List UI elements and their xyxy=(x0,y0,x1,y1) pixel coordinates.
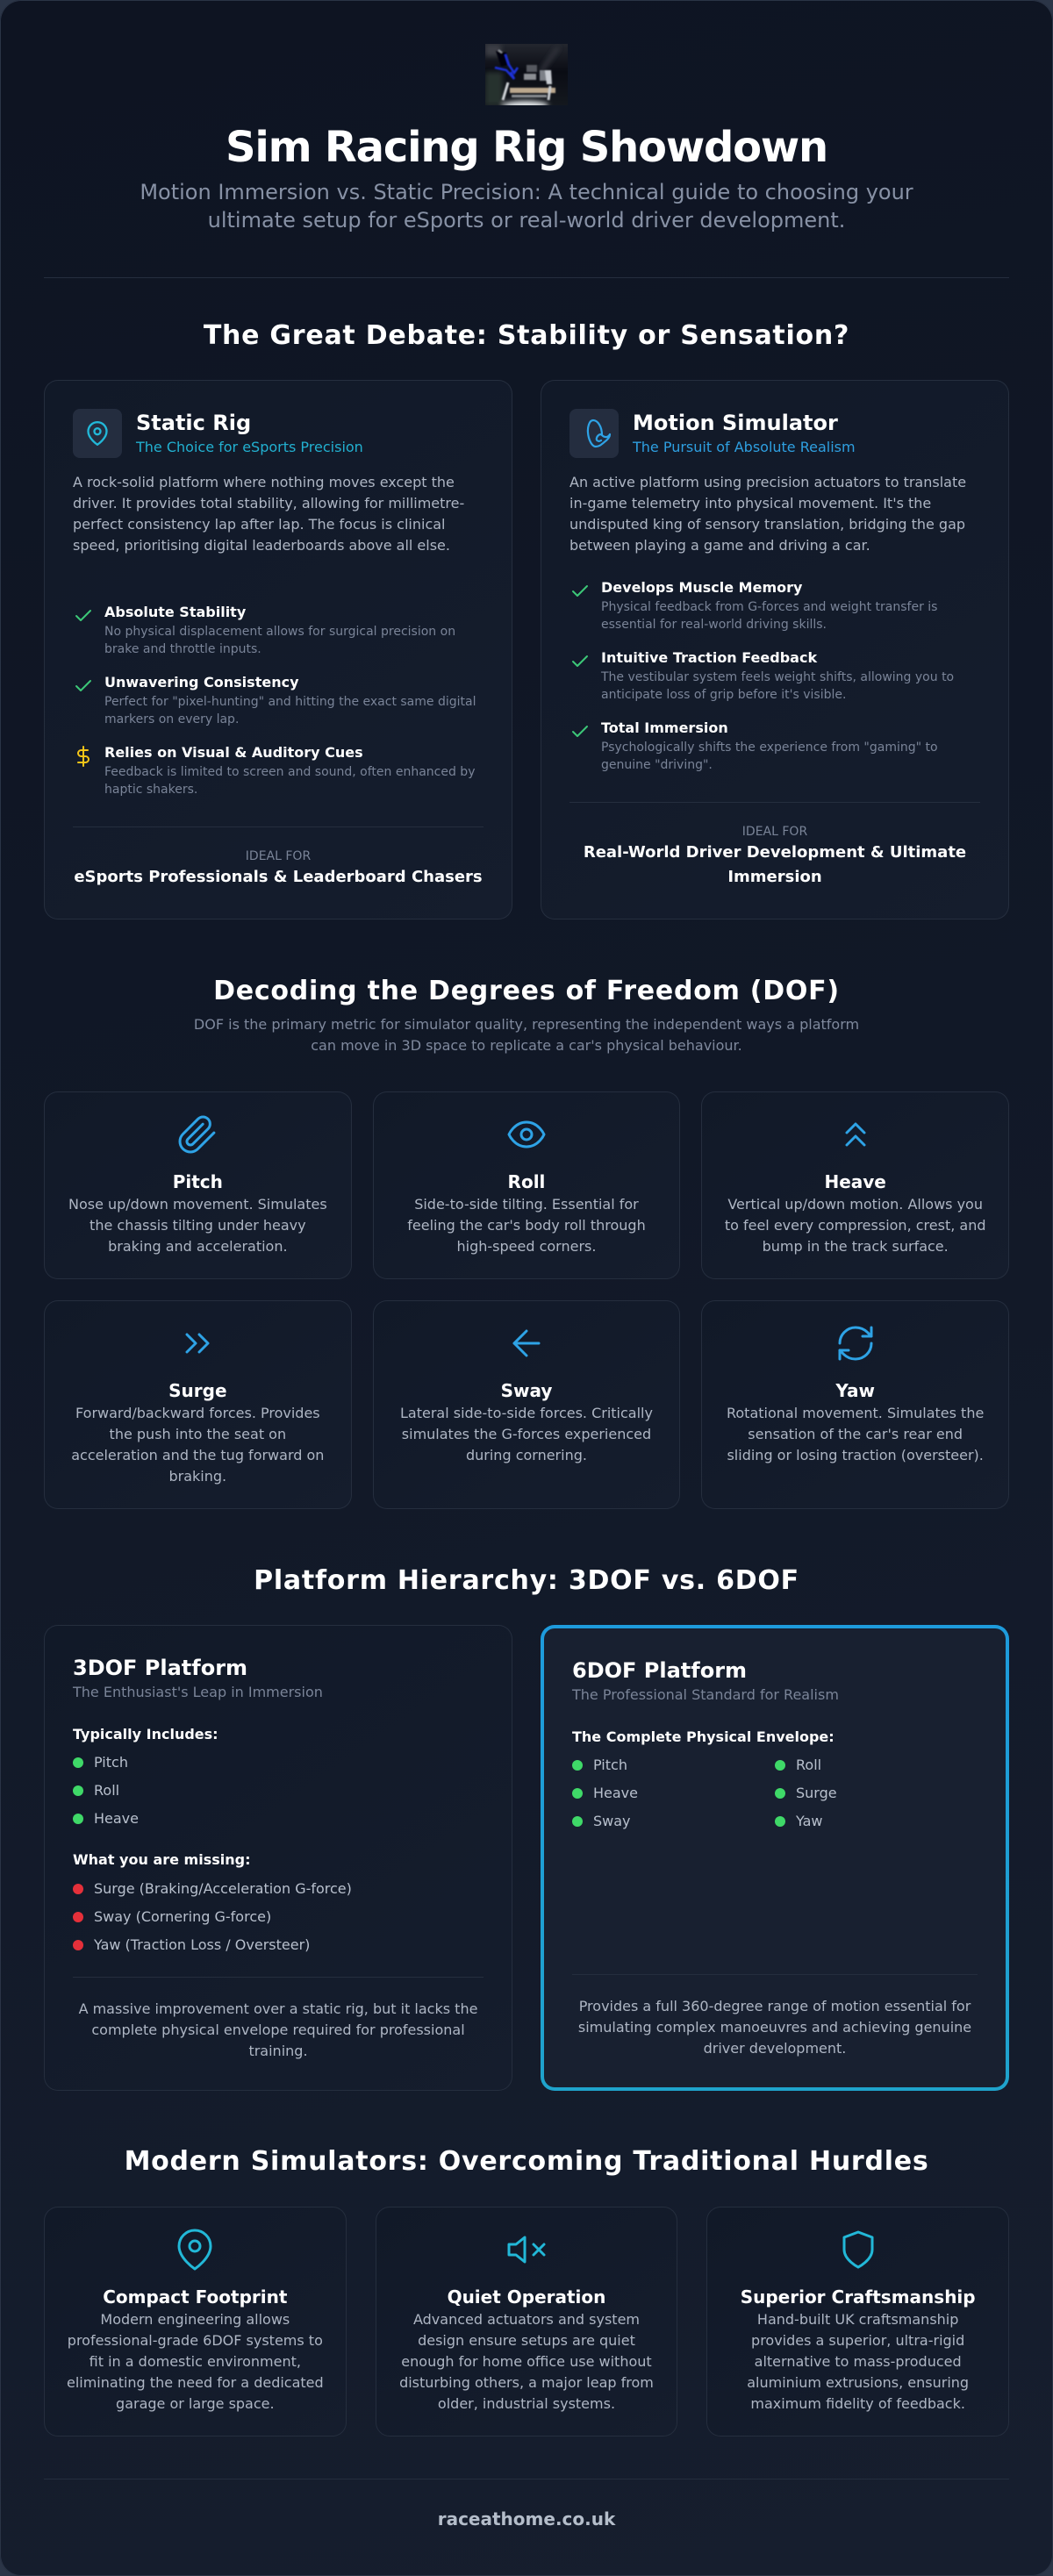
feature: unwavering consistency xyxy=(104,674,476,726)
pitch description: braking and acceleration. xyxy=(108,1238,288,1255)
feature: traction feedback xyxy=(600,649,954,702)
compact footprint description xyxy=(67,2311,324,2412)
surge description: braking. xyxy=(168,1468,226,1485)
roll description: feeling the car's body roll through xyxy=(407,1217,646,1234)
3dof title: 3DOF Platform xyxy=(73,1656,247,1680)
panel: roll xyxy=(373,1091,680,1279)
quiet operation description: design ensure setups are quiet xyxy=(418,2332,635,2349)
6dof tagline: The Professional Standard for Realism xyxy=(572,1686,839,1703)
ideal for value: Real-World Driver Development & Ultimate xyxy=(584,843,966,862)
sway description: during cornering. xyxy=(466,1447,587,1463)
panel: static rig xyxy=(44,380,512,919)
heading: the great debate: The Great Debate: Stability or Sensation? xyxy=(204,320,849,351)
yaw description: sliding or losing traction (oversteer). xyxy=(727,1447,984,1463)
quiet operation description: Advanced actuators and system xyxy=(413,2311,640,2328)
panel: surge xyxy=(44,1300,352,1509)
feature: visual and auditory cues xyxy=(104,744,475,797)
six axes list: Roll xyxy=(796,1757,821,1773)
missing heading: What you are missing: xyxy=(73,1851,250,1868)
feature: muscle memory xyxy=(601,579,937,632)
quiet operation description: disturbing others, a major leap from xyxy=(399,2374,654,2391)
feature: unwavering consistency: Unwavering Consistency xyxy=(104,674,298,691)
missing list: Surge (Braking/Acceleration G-force) xyxy=(94,1880,352,1897)
included list xyxy=(73,1754,139,1827)
header image: motion rig photo xyxy=(485,44,568,105)
includes heading: Typically Includes: xyxy=(73,1726,218,1742)
feature: unwavering consistency: Perfect for "pixel-hunting" and hitting the exact same digital xyxy=(104,695,476,709)
static rig tagline: The Choice for eSports Precision xyxy=(136,439,363,455)
compact footprint description: eliminating the need for a dedicated xyxy=(67,2374,324,2391)
motion simulator description: between playing a game and driving a car. xyxy=(569,537,870,554)
3dof summary: training. xyxy=(248,2043,308,2059)
feature: traction feedback: The vestibular system feels weight shifts, allowing you to xyxy=(601,670,954,684)
pitch description: the chassis tilting under heavy xyxy=(90,1217,306,1234)
heading: platform hierarchy: Platform Hierarchy: 3DOF vs. 6DOF xyxy=(254,1565,799,1596)
ideal for label: IDEAL FOR xyxy=(742,825,807,839)
roll description: high-speed corners. xyxy=(456,1238,596,1255)
six axes list: Sway xyxy=(593,1813,631,1829)
compact footprint description: fit in a domestic environment, xyxy=(90,2353,301,2370)
feature: absolute stability: Absolute Stability xyxy=(104,604,246,620)
motion simulator description: undisputed king of sensory translation, bridging the gap xyxy=(569,516,965,533)
panel: motion simulator xyxy=(541,380,1009,919)
heave description: to feel every compression, crest, and xyxy=(725,1217,985,1234)
feature: muscle memory: essential for real-world driving skills. xyxy=(601,618,827,632)
icon: check xyxy=(572,726,588,737)
3dof summary: complete physical envelope required for professional xyxy=(91,2021,465,2038)
static rig description: driver. It provides total stability, allowing for millimetre- xyxy=(73,495,464,512)
motion simulator description: An active platform using precision actuators to translate xyxy=(569,474,966,490)
panel: compact footprint xyxy=(44,2207,347,2436)
heading: modern simulators: Modern Simulators: Overcoming Traditional Hurdles xyxy=(125,2146,928,2177)
panel: pitch xyxy=(44,1091,352,1279)
heave title: Heave xyxy=(824,1171,886,1192)
quiet operation description xyxy=(399,2311,654,2412)
motion simulator heading: Motion Simulator xyxy=(633,411,838,435)
panel: 3dof platform xyxy=(44,1625,512,2091)
feature: visual and auditory cues: Relies on Visual & Auditory Cues xyxy=(104,744,363,761)
feature: total immersion: Total Immersion xyxy=(601,719,728,736)
6dof summary xyxy=(578,1998,971,2057)
ideal for value: eSports Professionals & Leaderboard Chasers xyxy=(74,868,483,886)
heave description xyxy=(725,1196,985,1255)
six axes list: Surge xyxy=(796,1785,837,1801)
compact footprint description: professional-grade 6DOF systems to xyxy=(68,2332,323,2349)
feature: traction feedback: Intuitive Traction Feedback xyxy=(601,649,817,666)
yaw description xyxy=(727,1405,984,1463)
surge description: acceleration and the tug forward on xyxy=(71,1447,324,1463)
superior craftsmanship description: provides a superior, ultra-rigid xyxy=(751,2332,964,2349)
pitch description xyxy=(68,1196,327,1255)
superior craftsmanship description: alternative to mass-produced xyxy=(755,2353,962,2370)
superior craftsmanship description: maximum fidelity of feedback. xyxy=(750,2395,965,2412)
superior craftsmanship title: Superior Craftsmanship xyxy=(741,2286,976,2308)
static rig description: A rock-solid platform where nothing moves except the xyxy=(73,474,455,490)
six axes list: Heave xyxy=(593,1785,638,1801)
feature: total immersion xyxy=(601,719,938,772)
icon: chevrons right xyxy=(185,1333,210,1354)
ideal for value xyxy=(584,843,966,886)
included list: Roll xyxy=(94,1782,119,1799)
surge description xyxy=(71,1405,324,1485)
3dof tagline: The Enthusiast's Leap in Immersion xyxy=(73,1684,323,1700)
heave description: Vertical up/down motion. Allows you xyxy=(727,1196,983,1213)
roll description: Side-to-side tilting. Essential for xyxy=(414,1196,639,1213)
icon: location pin xyxy=(73,409,122,458)
six axes list: Pitch xyxy=(593,1757,627,1773)
yaw description: sensation of the car's rear end xyxy=(748,1426,963,1442)
6dof summary: driver development. xyxy=(704,2040,846,2057)
dof intro text: can move in 3D space to replicate a car's physical behaviour. xyxy=(311,1037,742,1054)
panel: yaw xyxy=(701,1300,1009,1509)
icon: eye xyxy=(507,1121,546,1148)
feature: traction feedback: anticipate loss of grip before it's visible. xyxy=(601,688,846,702)
feature: visual and auditory cues: Feedback is limited to screen and sound, often enhanced by xyxy=(104,765,475,779)
roll title: Roll xyxy=(508,1171,545,1192)
icon: check xyxy=(572,655,588,667)
motion simulator tagline: The Pursuit of Absolute Realism xyxy=(633,439,856,455)
roll description xyxy=(407,1196,646,1255)
icon: dollar sign xyxy=(77,746,90,767)
6dof title: 6DOF Platform xyxy=(572,1658,747,1683)
feature: muscle memory: Physical feedback from G-forces and weight transfer is xyxy=(601,600,937,614)
compact footprint description: garage or large space. xyxy=(116,2395,275,2412)
surge description: the push into the seat on xyxy=(110,1426,286,1442)
included list: Pitch xyxy=(94,1754,128,1771)
feature: visual and auditory cues: haptic shakers. xyxy=(104,783,197,797)
surge description: Forward/backward forces. Provides xyxy=(75,1405,320,1421)
dof intro text: DOF is the primary metric for simulator quality, representing the independent ways a platform xyxy=(194,1016,859,1033)
icon: check xyxy=(572,585,588,597)
footer website: raceathome.co.uk xyxy=(438,2508,615,2529)
sway title: Sway xyxy=(501,1380,552,1401)
missing list: Yaw (Traction Loss / Oversteer) xyxy=(94,1936,310,1953)
compact footprint title: Compact Footprint xyxy=(103,2286,287,2308)
heave description: bump in the track surface. xyxy=(763,1238,949,1255)
compact footprint description: Modern engineering allows xyxy=(100,2311,290,2328)
six axes list xyxy=(572,1757,837,1829)
icon: location pin xyxy=(177,2229,212,2271)
panel: sway xyxy=(373,1300,680,1509)
included list: Heave xyxy=(94,1810,139,1827)
feature: total immersion: genuine "driving". xyxy=(601,758,713,772)
icon: arrow left xyxy=(512,1329,541,1357)
icon: refresh arrows xyxy=(838,1327,872,1360)
static rig description: speed, prioritising digital leaderboards above all else. xyxy=(73,537,450,554)
panel: 6dof platform xyxy=(541,1625,1009,2091)
feature: total immersion: Psychologically shifts the experience from "gaming" to xyxy=(601,741,938,755)
icon: paperclip xyxy=(179,1116,216,1153)
6dof summary: simulating complex manoeuvres and achieving genuine xyxy=(578,2019,971,2036)
subtitle xyxy=(140,180,913,233)
static rig heading: Static Rig xyxy=(136,411,251,435)
quiet operation title: Quiet Operation xyxy=(448,2286,605,2308)
pitch title: Pitch xyxy=(173,1171,223,1192)
heading: degrees of freedom: Decoding the Degrees of Freedom (DOF) xyxy=(213,976,840,1006)
superior craftsmanship description: aluminium extrusions, ensuring xyxy=(747,2374,969,2391)
surge title: Surge xyxy=(168,1380,227,1401)
subtitle: ultimate setup for eSports or real-world driver development. xyxy=(208,208,845,233)
sway description xyxy=(400,1405,653,1463)
yaw title: Yaw xyxy=(835,1380,875,1401)
motion simulator description: in-game telemetry into physical movement. It's the xyxy=(569,495,931,512)
title: Sim Racing Rig Showdown xyxy=(226,123,827,172)
pitch description: Nose up/down movement. Simulates xyxy=(68,1196,327,1213)
ideal for label: IDEAL FOR xyxy=(246,849,311,863)
feature: absolute stability xyxy=(104,604,455,656)
panel: heave xyxy=(701,1091,1009,1279)
yaw description: Rotational movement. Simulates the xyxy=(727,1405,984,1421)
sway description: simulates the G-forces experienced xyxy=(402,1426,651,1442)
icon: check xyxy=(75,680,91,691)
ideal for value: Immersion xyxy=(727,868,822,886)
missing list xyxy=(73,1880,352,1953)
icon: motion squiggle xyxy=(569,409,619,458)
6dof summary: Provides a full 360-degree range of motion essential for xyxy=(579,1998,971,2014)
icon: chevrons up xyxy=(845,1122,866,1147)
feature: absolute stability: No physical displacement allows for surgical precision on xyxy=(104,625,455,639)
static rig description xyxy=(73,474,464,554)
3dof summary xyxy=(79,2000,477,2059)
subtitle: Motion Immersion vs. Static Precision: A technical guide to choosing your xyxy=(140,180,913,204)
superior craftsmanship description: Hand-built UK craftsmanship xyxy=(757,2311,958,2328)
icon: muted speaker xyxy=(507,2236,546,2264)
3dof summary: A massive improvement over a static rig, but it lacks the xyxy=(79,2000,477,2017)
icon: shield xyxy=(842,2230,874,2269)
feature: absolute stability: brake and throttle inputs. xyxy=(104,642,261,656)
missing list: Sway (Cornering G-force) xyxy=(94,1908,271,1925)
quiet operation description: enough for home office use without xyxy=(401,2353,652,2370)
dof intro text xyxy=(194,1016,859,1054)
envelope heading: The Complete Physical Envelope: xyxy=(572,1728,835,1745)
superior craftsmanship description xyxy=(706,2309,1009,2415)
static rig description: perfect consistency lap after lap. The focus is clinical xyxy=(73,516,445,533)
sway description: Lateral side-to-side forces. Critically xyxy=(400,1405,653,1421)
six axes list: Yaw xyxy=(796,1813,822,1829)
icon: check xyxy=(75,610,91,621)
feature: muscle memory: Develops Muscle Memory xyxy=(601,579,802,596)
panel: superior craftsmanship xyxy=(706,2207,1009,2436)
panel: quiet operation xyxy=(376,2207,677,2436)
motion simulator description xyxy=(569,474,966,554)
quiet operation description: older, industrial systems. xyxy=(438,2395,615,2412)
feature: unwavering consistency: markers on every lap. xyxy=(104,712,239,726)
